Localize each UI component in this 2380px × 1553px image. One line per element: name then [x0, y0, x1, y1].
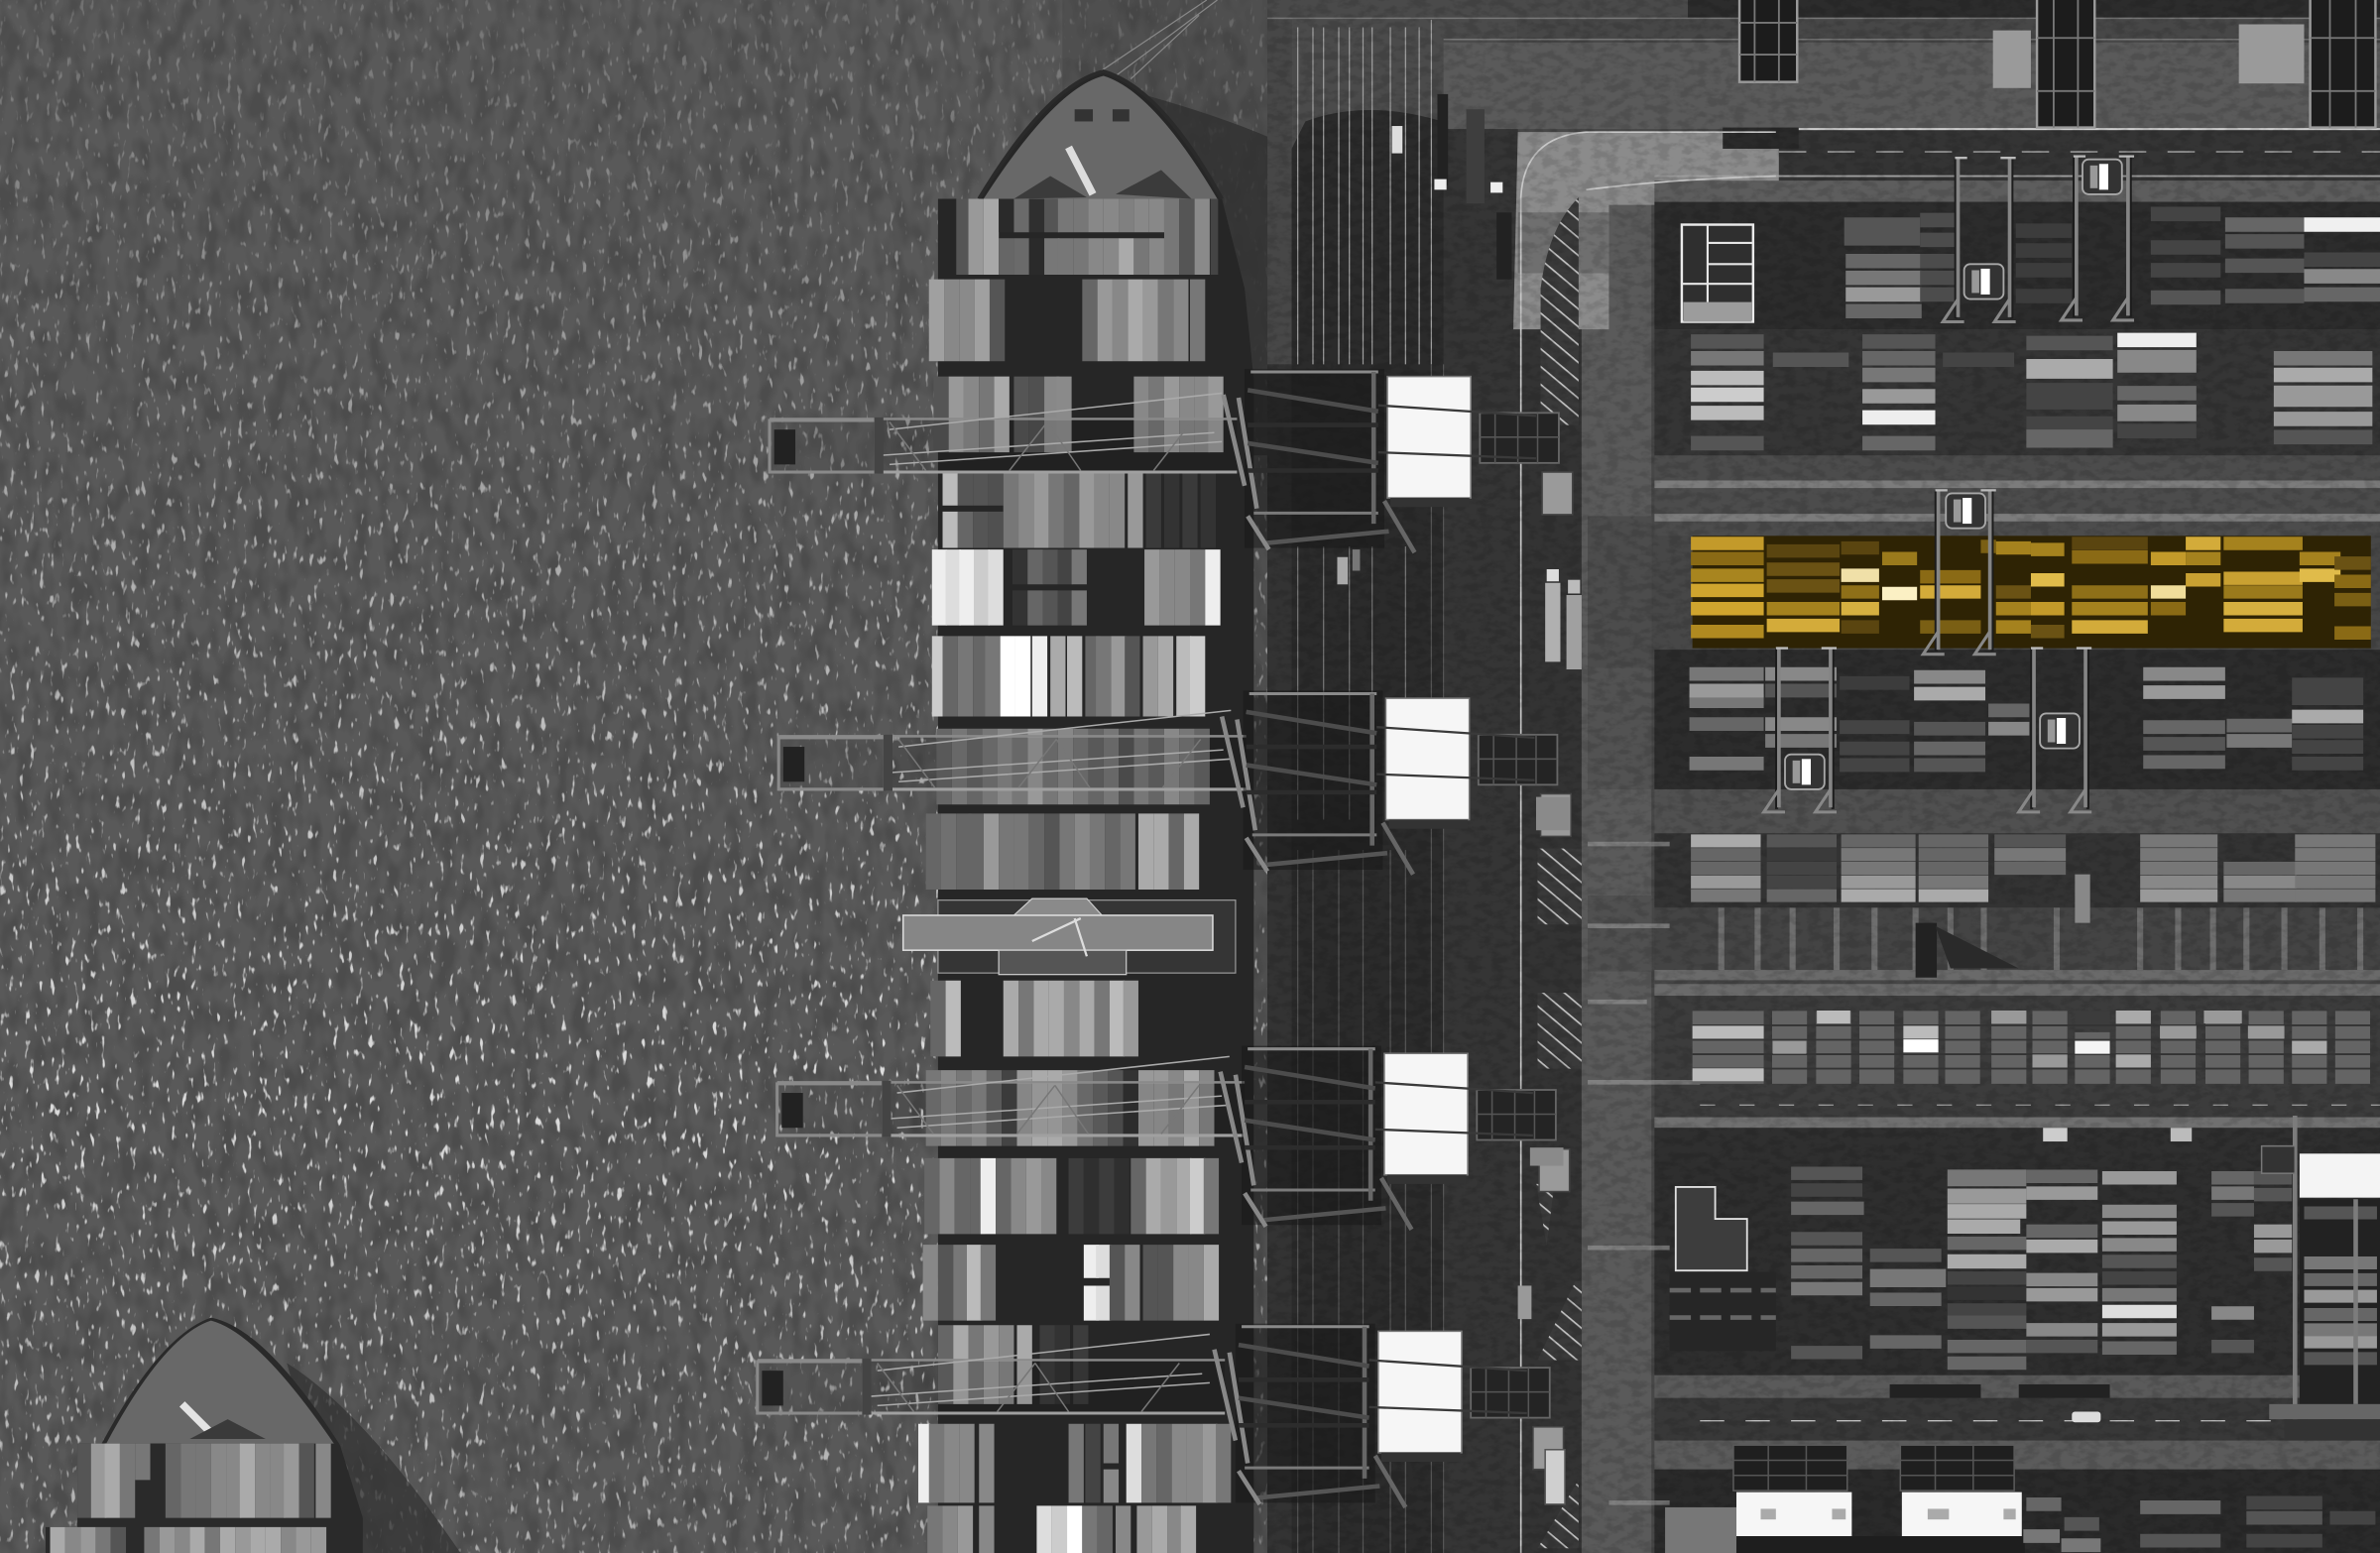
yard containers row 4: [1691, 841, 2375, 896]
yard gantry crane C over gold block: [1923, 490, 1996, 655]
quay crane 1: [770, 369, 1573, 552]
yard gantry crane A: [1943, 158, 2016, 321]
hatched lane markings: [1536, 197, 1582, 1548]
ship shadow on the water: [1130, 91, 1267, 455]
mooring lines: [1101, 0, 1218, 79]
bay O: [935, 1505, 1188, 1553]
right gantry crane with containers: [2262, 1116, 2380, 1441]
apron rail lines: [1298, 0, 1431, 364]
L-shaped building outlined white: [1676, 1187, 1747, 1270]
top yard and rails: [1267, 0, 2380, 202]
yard containers row 1: [1844, 214, 2380, 311]
yard containers row 2: [1691, 340, 2372, 443]
main container ship hull: [938, 71, 1253, 1553]
bay G: [944, 729, 1202, 804]
bay I: [938, 981, 1130, 1056]
bottom right containers: [2023, 1502, 2375, 1545]
trucks and vehicles: [1337, 94, 2192, 1504]
ship container bays: [924, 199, 1224, 1553]
ship bridge superstructure: [903, 898, 1236, 975]
ship bow deck: [979, 71, 1222, 199]
ground grain overlay: [1267, 0, 2380, 1553]
yard gantry crane B: [2062, 157, 2134, 320]
bay C: [941, 377, 1216, 452]
bay D: [950, 472, 1208, 548]
bay F: [938, 636, 1198, 716]
bay K: [932, 1158, 1211, 1234]
sea surface: [0, 0, 1267, 1553]
second ship shadow on water: [287, 1364, 461, 1553]
bay A: [964, 199, 1214, 275]
bay H: [933, 813, 1192, 890]
yard containers row 3: [1690, 674, 2363, 765]
quay crane 3: [777, 1046, 1570, 1230]
yard gantry crane E: [2019, 649, 2091, 812]
quay crane 4: [758, 1324, 1564, 1507]
highlighted gold container block: [1691, 536, 2371, 649]
bay E: [939, 549, 1213, 626]
white curve road marking: [1521, 132, 1776, 1553]
white outlined office building: [1682, 225, 1753, 321]
bay N: [924, 1424, 1224, 1502]
top gantry cranes and light pads: [1739, 0, 2375, 128]
quay crane 2: [778, 690, 1571, 875]
bay M: [946, 1325, 1081, 1404]
yard containers row 5: [1693, 1011, 2371, 1084]
quay and land base: [1267, 0, 2380, 1553]
yard blocks and roads: [1654, 202, 2380, 1553]
bay J: [933, 1070, 1207, 1146]
second ship bow and containers: [46, 1318, 363, 1553]
bay L: [930, 1245, 1211, 1321]
yard gantry crane D: [1764, 649, 1837, 812]
bay B: [936, 280, 1198, 361]
bottom gantry cranes with white roofs: [1665, 1445, 2025, 1553]
lower yard containers: [1791, 1173, 2292, 1364]
light shadow streaks across road: [1588, 844, 1700, 1502]
